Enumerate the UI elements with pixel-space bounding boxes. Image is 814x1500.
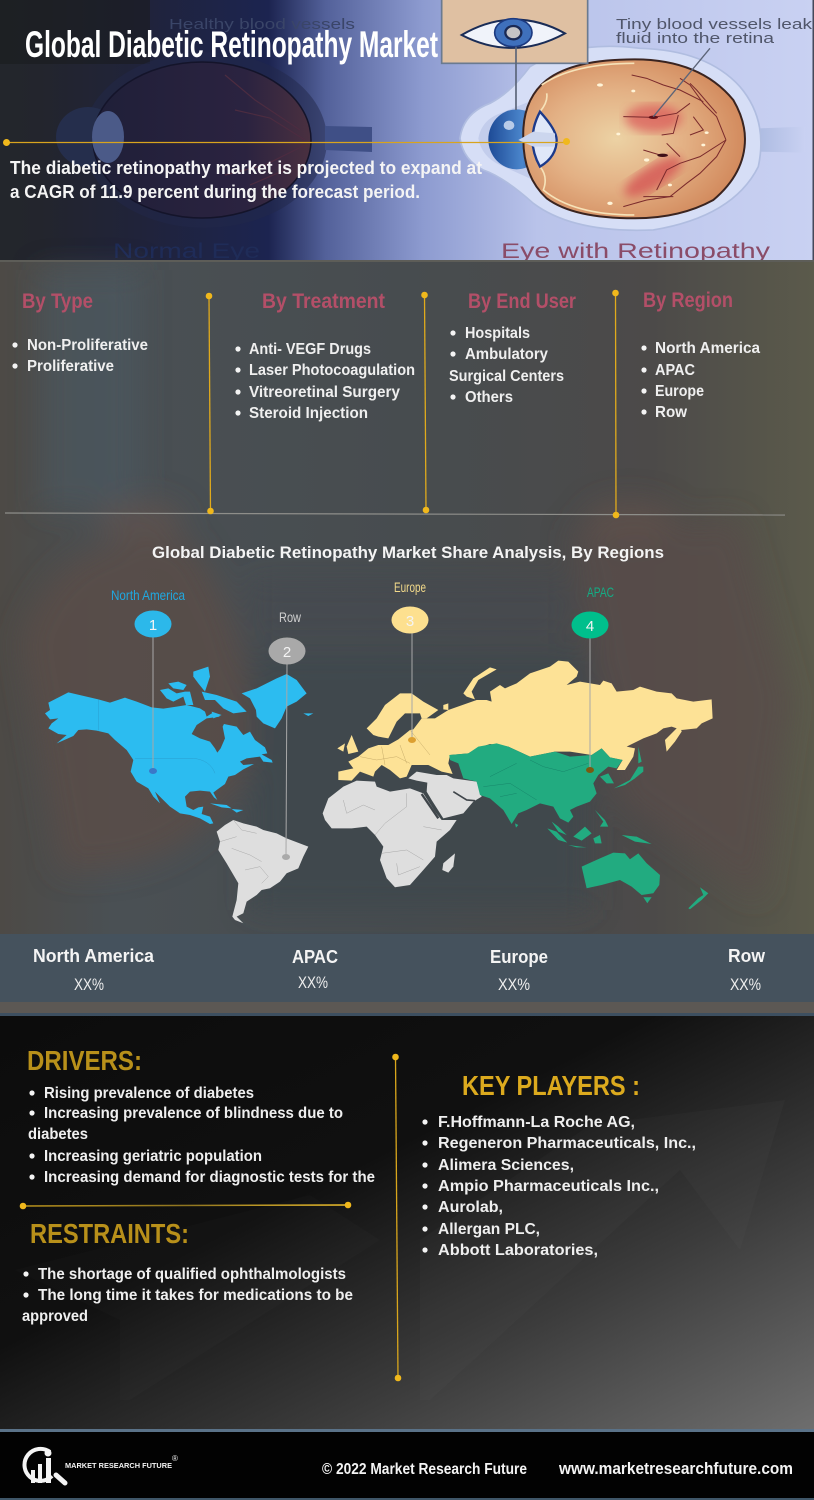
list: region items	[641, 340, 760, 421]
list: treatment items: Vitreoretinal Surgery	[249, 384, 400, 401]
stat: north america: XX%	[74, 975, 104, 994]
market summary text: a CAGR of 11.9 percent during the forecast period.	[10, 182, 420, 202]
list: key players: Ampio Pharmaceuticals Inc.,	[438, 1178, 659, 1195]
list: region items: Row	[655, 404, 688, 421]
panel: footer	[0, 1432, 814, 1500]
region: north america	[45, 667, 313, 824]
panel: by treatment	[235, 290, 415, 422]
stat: apac: APAC	[292, 947, 338, 967]
marker: north america: North America	[111, 587, 185, 603]
list: treatment items	[235, 341, 415, 422]
label: tiny blood vessels: Tiny blood vessels leak	[616, 16, 813, 33]
list: drivers: Rising prevalence of diabetes	[44, 1085, 254, 1102]
list: region items: North America	[655, 340, 760, 357]
marker: europe	[392, 579, 428, 743]
inset: eye close-up	[442, 0, 588, 110]
stat: row	[728, 946, 766, 994]
market summary text: The diabetic retinopathy market is projected to expand at	[10, 158, 482, 178]
panel: segmentation and map background	[0, 260, 814, 935]
marker: europe: Europe	[394, 579, 426, 595]
label: tiny blood vessels: fluid into the retina	[616, 30, 775, 47]
heading: by treatment: By Treatment	[262, 290, 385, 313]
accent line	[3, 138, 570, 146]
list: region items: APAC	[655, 362, 695, 379]
panel: key players	[422, 1070, 696, 1259]
list: key players: Regeneron Pharmaceuticals, Inc.,	[438, 1135, 696, 1152]
list: treatment items: Laser Photocoagulation	[249, 362, 415, 379]
marker: apac: 4	[586, 618, 594, 635]
list: key players: F.Hoffmann-La Roche AG,	[438, 1114, 635, 1131]
list: key players: Alimera Sciences,	[438, 1157, 574, 1174]
list: type items: Non-Proliferative	[27, 337, 148, 354]
stat: europe	[490, 947, 548, 994]
stat: europe: Europe	[490, 947, 548, 967]
panel: regional share strip	[0, 934, 814, 1016]
list: region items: Europe	[655, 383, 704, 400]
panel: hero header	[0, 0, 814, 263]
stat: north america: North America	[33, 946, 155, 966]
divider: key players	[392, 1054, 401, 1381]
illustration: eye with retinopathy	[460, 46, 805, 230]
panel: by region	[641, 289, 760, 421]
list: drivers: Increasing geriatric population	[44, 1148, 262, 1165]
marker: apac	[572, 584, 614, 773]
column dividers	[206, 290, 619, 518]
heading: key players: KEY PLAYERS :	[462, 1070, 640, 1101]
marker: europe: 3	[406, 613, 414, 630]
list: restraints: The long time it takes for medications to be	[38, 1287, 353, 1304]
list: type items: Proliferative	[27, 358, 114, 375]
list: end user items: Ambulatory	[465, 346, 548, 363]
marker: north america: 1	[149, 617, 157, 634]
panel: by end user	[449, 290, 576, 406]
list: treatment items: Anti- VEGF Drugs	[249, 341, 371, 358]
list: type items	[12, 337, 148, 375]
label: normal eye: Normal Eye	[113, 240, 260, 263]
stat: north america	[33, 946, 155, 994]
illustration: normal eye	[56, 61, 372, 219]
stat: row: XX%	[730, 975, 761, 994]
logo wordmark: MARKET RESEARCH FUTURE	[65, 1461, 172, 1470]
list: drivers: Increasing demand for diagnostic tests for the	[44, 1169, 375, 1186]
stat: apac	[292, 947, 338, 992]
region: europe and russia	[337, 661, 713, 781]
list: key players: Aurolab,	[438, 1199, 503, 1216]
label: eye with retinopathy: Eye with Retinopathy	[501, 240, 771, 263]
list: key players: Allergan PLC,	[438, 1221, 540, 1238]
divider: drivers and restraints	[20, 1202, 351, 1209]
label: healthy blood vessels: Healthy blood vessels	[169, 16, 355, 33]
list: end user items: Others	[465, 389, 513, 406]
stat: apac: XX%	[298, 973, 328, 992]
list: drivers	[28, 1085, 375, 1186]
heading: by type: By Type	[22, 290, 93, 313]
heading: restraints: RESTRAINTS:	[30, 1218, 189, 1249]
market summary text	[10, 158, 482, 202]
panel: restraints	[22, 1218, 353, 1325]
stat: europe: XX%	[498, 975, 530, 994]
list: end user items: Surgical Centers	[449, 368, 564, 385]
title: Global Diabetic Retinopathy Market	[25, 24, 438, 65]
heading: by end user: By End User	[468, 290, 576, 313]
icon: company logo	[25, 1449, 65, 1483]
list: restraints: The shortage of qualified ophthalmologists	[38, 1266, 346, 1283]
copyright: © 2022 Market Research Future	[322, 1461, 527, 1478]
label: tiny blood vessels	[616, 18, 812, 43]
marker: row	[268, 609, 306, 860]
heading: drivers: DRIVERS:	[27, 1045, 142, 1076]
list: drivers: diabetes	[28, 1126, 88, 1143]
panel: by type	[12, 290, 148, 375]
panel: drivers	[27, 1045, 375, 1186]
list: restraints: approved	[22, 1308, 88, 1325]
list: drivers: Increasing prevalence of blindness due to	[44, 1105, 343, 1122]
marker: row: 2	[283, 644, 291, 661]
panel: lower background	[0, 1016, 814, 1432]
logo wordmark	[65, 1454, 178, 1470]
list: end user items: Hospitals	[465, 325, 530, 342]
region: asia pacific	[449, 743, 708, 909]
region: rest of world	[217, 772, 482, 923]
list: restraints	[22, 1266, 353, 1325]
logo wordmark: ®	[172, 1454, 178, 1463]
heading: by region: By Region	[643, 289, 733, 312]
marker: north america	[111, 587, 185, 774]
list: key players: Abbott Laboratories,	[438, 1242, 598, 1259]
heading: market share analysis: Global Diabetic Retinopathy Market Share Analysis, By Regions	[152, 543, 664, 562]
website: www.marketresearchfuture.com	[558, 1459, 793, 1478]
list: treatment items: Steroid Injection	[249, 405, 368, 422]
stat: row: Row	[728, 946, 766, 966]
list: key players	[422, 1114, 696, 1259]
list: end user items	[449, 325, 564, 406]
marker: row: Row	[279, 609, 302, 625]
world map	[45, 661, 713, 923]
marker: apac: APAC	[587, 584, 614, 600]
